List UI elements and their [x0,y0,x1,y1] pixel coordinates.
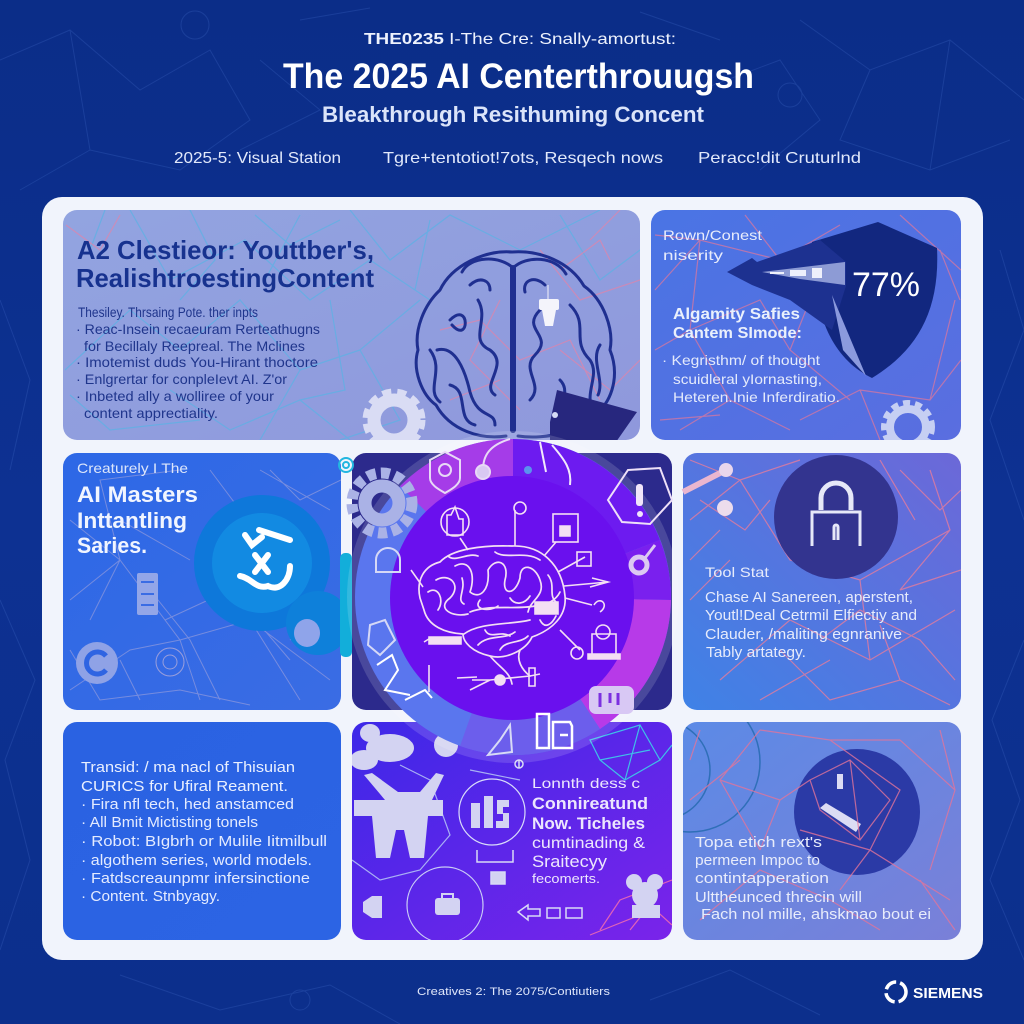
network lines [70,470,341,705]
icon: document [137,573,158,615]
panel: transform list [63,722,341,940]
icon: chart letters [471,796,509,828]
network lines [655,215,961,440]
logo: SIEMENS [886,982,983,1002]
bullet text: · Imotemist duds You-Hirant thoctore [76,354,318,370]
small label: Tool Stat [705,564,769,580]
panel: AI masters [63,453,350,710]
navigation labels: 2025-5: Visual Station [174,150,341,167]
icon: shield with arrow [727,222,937,378]
icon: C logo [76,642,118,684]
logo: SIEMENS: SIEMENS [913,985,983,1002]
icon: flow connector [477,760,523,884]
description text: permeen Impoc to [695,852,820,869]
bullet text: · Fira nfl tech, hed anstamced [81,796,294,813]
network lines [65,210,640,440]
panel heading: Cantem SImode: [673,325,802,342]
bullet text: scuidleral yIornasting, [673,371,822,387]
panel: lock tool [683,453,961,710]
icon: bag [435,894,460,915]
navigation labels [174,150,861,167]
icon: gear cluster [626,874,663,918]
description text: Clauder, /maliting egnranive [705,626,902,643]
bullet text: · All Bmit Mictisting tonels [81,814,258,831]
icon: pins [683,463,733,516]
header [174,31,861,167]
bullet text: Thesiley. Thrsaing Pote. ther inpts [78,304,258,320]
icon: speaker [363,896,382,918]
icon: small bubble [294,619,320,647]
bullet text: · Reac-Insein recaeuram Rerteathugns [76,321,320,337]
bullet text [81,796,327,905]
icon: dark circle with probe [794,749,920,875]
main white card [42,197,983,960]
icon: blue arcs [683,722,761,833]
icon: plug [524,442,570,485]
icon: gear [352,473,412,533]
panel heading: Algamity Safies [673,306,800,323]
icon: robot [354,773,444,858]
panel: robot and strategy [350,722,672,943]
spokes and satellite icons [411,502,620,692]
halo [347,431,679,763]
navigation labels: Tgre+tentotiot!7ots, Resqech nows [383,150,663,167]
heading and text: Now. Ticheles [532,814,645,833]
panel: shield statistic [651,210,961,451]
icon: pin [476,439,510,479]
main title: The 2025 AI Centerthrouugsh [283,57,754,96]
heading text [81,759,295,795]
icon: bar tile [537,714,572,748]
bullet text: Heteren.Inie Inferdiratio. [673,389,840,405]
subtitle: Bleakthrough Resithuming Concent [322,102,705,127]
icon: shield [430,452,460,493]
panel: central background [352,453,672,710]
stat: 77%: 77% [852,266,920,304]
bullet text: · Fatdscreaunpmr infersinctione [81,870,310,887]
navigation labels: Peracc!dit Cruturlnd [698,150,861,167]
icon: padlock circle [774,455,898,579]
icon: sprout [488,725,512,755]
bullet text: · Content. Stnbyagy. [81,888,220,905]
description text [705,589,917,661]
small label [663,227,762,263]
heading: A2 Clestieor: Youttber's, [77,235,374,265]
icon: gear [366,392,422,448]
network lines [352,725,672,943]
description text: Tably artategy. [706,644,806,661]
heading text: CURICS for Ufiral Reament. [81,778,288,795]
inner disc [390,476,634,720]
footer caption: Creatives 2: The 2075/Contiutiers [417,986,611,998]
small label: Creaturely I The [77,460,188,476]
panel heading [673,306,802,342]
heading [76,235,374,293]
heading and text: Lonnth dess c [532,775,640,791]
bullet text: for Becillaly Reepreal. The Mclines [84,338,305,354]
bullet text: · Inbeted ally a wolliree of your [76,388,274,404]
description text: Ulttheunced threcin will [695,889,862,906]
bullet text: · Robot: BIgbrh or Mulile Iitmilbull [81,833,327,850]
bullet text [662,352,840,405]
heading text: Transid: / ma nacl of Thisuian [81,759,295,776]
central brain hub [347,431,679,763]
outer ring segments [355,439,671,755]
description text: contintapperation [695,870,829,887]
icon: dark tag [550,390,637,442]
icon: cloud shapes [352,724,458,770]
description text: Topa etich rext's [695,834,822,851]
icon: white probe [539,285,559,326]
heading: AI Masters [77,482,198,507]
panel: impact note [683,722,961,940]
heading and text [532,775,648,886]
panel: brain content strategy [63,210,640,448]
description text: Fach nol mille, ahskmao bout ei [701,906,931,923]
icon: arrows flow [518,905,582,920]
network lines [690,460,961,705]
description text: Youtl!Deal Cetrmil Elfiectiy and [705,607,917,624]
heading [77,482,198,558]
small label: niserity [663,247,723,263]
heading and text: Sraitecyy [532,852,608,871]
heading: RealishtroestingContent [76,263,374,293]
bullet text: · Kegristhm/ of thought [662,352,820,368]
bullet text: · algothem series, world models. [81,852,312,869]
heading and text: fecomerts. [532,871,600,886]
description text: Chase AI Sanereen, aperstent, [705,589,913,606]
icon: chain circle [194,495,350,655]
icon: left icons [368,548,432,700]
bullet text: content apprectiality. [84,405,218,421]
bullet text [76,304,320,421]
description text [695,834,931,923]
icon: gear [884,403,932,451]
icon: key [631,545,655,573]
brain outline [419,546,565,684]
bullet text: · Enlgrertar for conpleIevt AI. Z'or [76,371,287,387]
kicker line: THE0235 I-The Cre: Snally-amortust: [364,31,676,48]
network lines [690,730,955,930]
icon: bottom-right chart tile [589,686,634,714]
cyan connector between panels [339,458,353,657]
icon: alert hexagon [608,468,672,524]
heading and text: Connireatund [532,794,648,813]
heading and text: cumtinading & [532,835,645,852]
small label: Rown/Conest [663,227,762,243]
icon: top-down brain [416,252,614,437]
heading: Saries. [77,533,147,558]
icon: outline rose [156,648,184,676]
heading: Inttantling [77,508,187,533]
